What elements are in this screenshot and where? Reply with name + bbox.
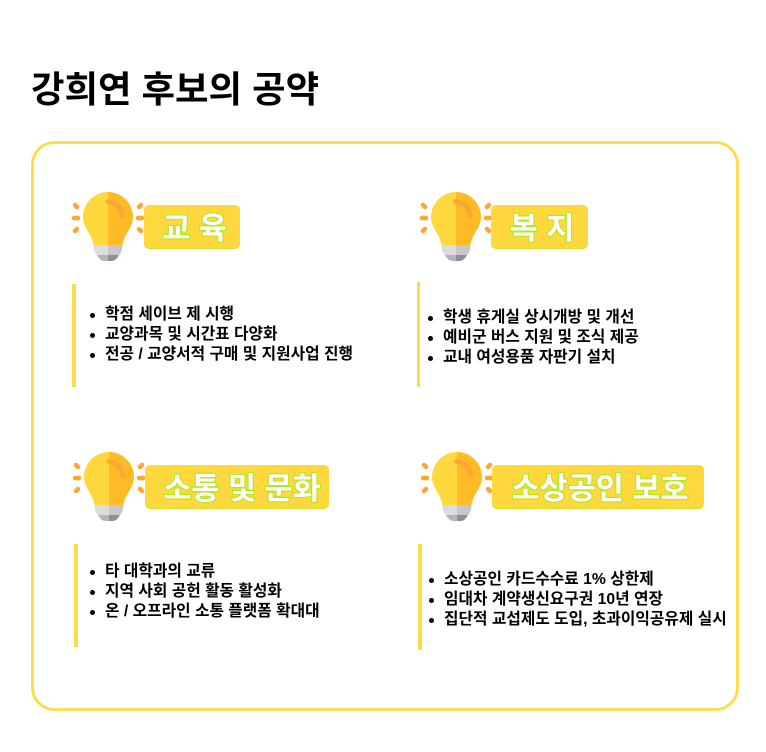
list: small business pledges: 집단적 교섭제도 도입, 초과이익공유제 실시 — [444, 611, 727, 628]
label: small business protection: 소상공인 보호 — [512, 472, 688, 506]
list: communication pledges: 지역 사회 공헌 활동 활성화 — [105, 583, 282, 600]
label: education — [144, 205, 240, 248]
icon: light bulb welfare — [420, 192, 492, 261]
list: communication pledges — [90, 562, 320, 620]
icon: light bulb education — [72, 192, 144, 261]
label: communication and culture: 소통 및 문화 — [163, 472, 321, 506]
label: welfare — [491, 205, 588, 248]
list: education pledges: 전공 / 교양서적 구매 및 지원사업 진행 — [105, 346, 353, 363]
accent bar: communication — [74, 544, 78, 647]
label: communication and culture — [145, 465, 329, 508]
accent bar: welfare — [417, 282, 420, 387]
list: welfare pledges: 예비군 버스 지원 및 조식 제공 — [443, 329, 639, 346]
list: welfare pledges — [428, 308, 639, 366]
label: small business protection — [492, 465, 704, 508]
accent bar: education — [72, 284, 76, 387]
list: welfare pledges: 교내 여성용품 자판기 설치 — [443, 349, 616, 366]
panel: pledges card — [31, 141, 739, 711]
list: education pledges: 학점 세이브 제 시행 — [105, 306, 234, 323]
label: education: 교 육 — [162, 212, 227, 246]
list: communication pledges: 온 / 오프라인 소통 플랫폼 확대대 — [105, 603, 320, 620]
icon: light bulb communication — [72, 452, 145, 521]
icon: light bulb small business — [420, 452, 492, 521]
title: 강희연 후보의 공약 — [31, 69, 319, 110]
list: communication pledges: 타 대학과의 교류 — [105, 563, 215, 580]
list: education pledges — [90, 305, 353, 363]
list: education pledges: 교양과목 및 시간표 다양화 — [105, 326, 278, 343]
list: welfare pledges: 학생 휴게실 상시개방 및 개선 — [443, 309, 634, 326]
list: small business pledges — [429, 570, 727, 628]
accent bar: small business — [418, 544, 422, 650]
list: small business pledges: 임대차 계약생신요구권 10년 연장 — [444, 591, 663, 608]
list: small business pledges: 소상공인 카드수수료 1% 상한제 — [444, 571, 654, 588]
label: welfare: 복 지 — [510, 212, 574, 246]
